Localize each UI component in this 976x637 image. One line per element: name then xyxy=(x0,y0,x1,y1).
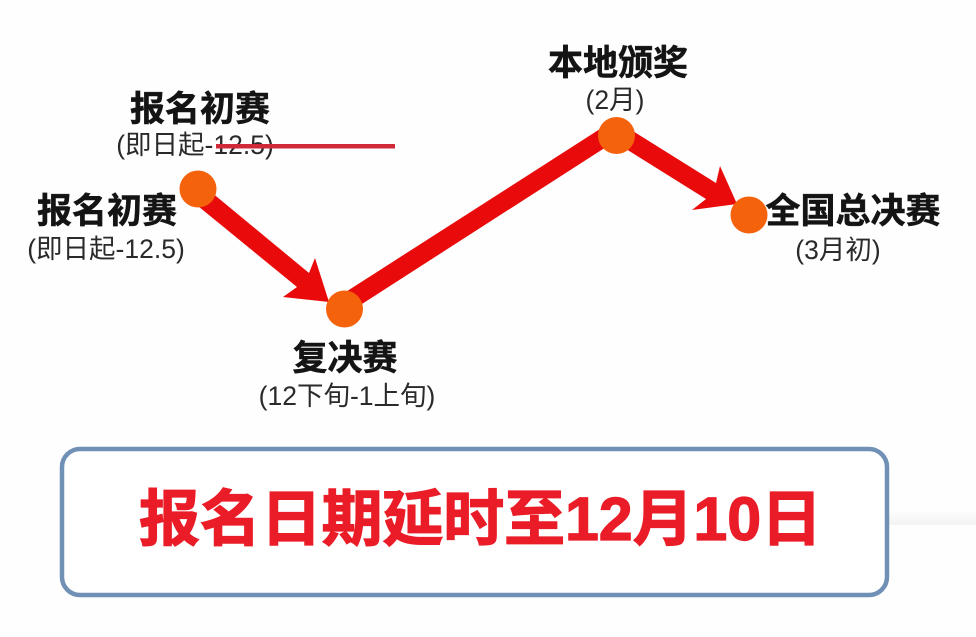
date: local awards: (2月) xyxy=(586,85,644,115)
heading: local awards: 本地颁奖 xyxy=(548,44,688,83)
heading: semifinal: 复决赛 xyxy=(292,339,398,378)
callout box xyxy=(62,449,887,595)
date: national final: (3月初) xyxy=(795,235,881,265)
node: semifinal xyxy=(326,290,363,328)
arrow: sign-up to semifinal xyxy=(193,187,329,302)
node: local awards xyxy=(598,117,635,154)
date: sign-up (struck): (即日起-12.5) xyxy=(116,130,274,160)
heading: sign-up (struck): 报名初赛 xyxy=(130,90,270,129)
date: semifinal: (12下旬-1上旬) xyxy=(259,381,435,411)
heading: national final: 全国总决赛 xyxy=(765,192,941,231)
arrow: local awards to national final xyxy=(618,128,737,210)
node: national final xyxy=(730,196,768,234)
strikethrough line xyxy=(216,144,395,148)
connector: semifinal to local awards xyxy=(341,124,617,311)
node: sign-up xyxy=(180,170,216,208)
callout text: 报名日期延时至12月10日 xyxy=(139,485,822,553)
date: sign-up: (即日起-12.5) xyxy=(27,234,185,264)
heading: sign-up: 报名初赛 xyxy=(37,192,177,231)
